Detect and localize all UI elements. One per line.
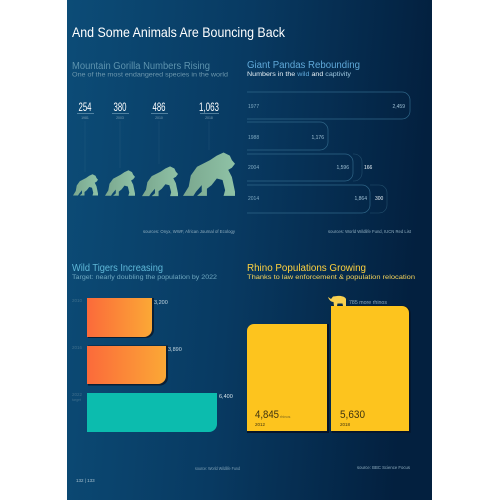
tiger year labels: 2010: [72, 298, 83, 303]
gorilla stat 380: 2003: [116, 116, 124, 120]
rhino source: source: BBC Science Focus: [357, 465, 410, 470]
gorilla stat 254: 1981: [81, 116, 89, 120]
gorilla heading: Mountain Gorilla Numbers Rising: [72, 61, 210, 72]
panda bar 2004: [247, 154, 373, 181]
panda bar 2014: [247, 185, 387, 213]
rhino heading: Rhino Populations Growing: [247, 263, 366, 274]
gorilla stat 380: 380: [114, 102, 126, 114]
rhino bar 2012: [247, 324, 329, 433]
gorilla stat 1,063: [199, 102, 219, 120]
tiger bar 2016: 3,890: [168, 347, 182, 353]
title: And Some Animals Are Bouncing Back: [72, 24, 286, 40]
panda subheading: Numbers in the wild and captivity: [247, 71, 352, 78]
page background: [67, 0, 432, 500]
gorilla stat 486: 486: [152, 102, 166, 114]
panda bar 1988: [247, 122, 328, 150]
panda heading: Giant Pandas Rebounding: [247, 60, 360, 71]
panda bar 1988: 1988: [248, 135, 259, 141]
panda bar 2014: 2014: [248, 196, 259, 202]
rhino subheading: Thanks to law enforcement & population relocation: [247, 274, 415, 281]
panel: mountain gorillas: [72, 61, 236, 234]
icon: gorilla 1: [73, 174, 98, 196]
tiger bar 2022 target: 6,400: [219, 394, 233, 400]
panda bar 2014: 1,864: [354, 196, 367, 202]
rhino bar 2012: 2012: [255, 422, 266, 427]
icon: gorilla 3: [142, 166, 178, 196]
rhino bar 2012: 4,845: [255, 409, 279, 421]
gorilla stat 486: [151, 102, 168, 120]
panel: rhinos: [247, 263, 415, 470]
tiger year labels: target: [72, 398, 81, 402]
panda bar 1988: 1,176: [311, 135, 324, 141]
gorilla stat 380: [112, 102, 129, 120]
panda source: sources: World Wildlife Fund, IUCN Red List: [328, 229, 412, 234]
tiger bar 2010: 3,200: [154, 300, 168, 306]
leader lines: [85, 121, 209, 172]
gorilla stat 1,063: 1,063: [199, 102, 219, 114]
rhino bar 2012: rhinos: [280, 415, 290, 419]
tiger heading: Wild Tigers Increasing: [72, 263, 163, 274]
panel: wild tigers: [72, 263, 241, 471]
icon: gorilla 2: [105, 170, 135, 196]
gorilla subheading: One of the most endangered species in the world: [72, 72, 228, 78]
panda bar 2014: 300: [375, 196, 384, 202]
panda bar 1977: 1977: [248, 104, 259, 110]
rhino callout: 785 more rhinos: [349, 300, 388, 306]
page number: 132 | 133: [76, 478, 95, 483]
panda bar 2004: 1,596: [336, 165, 349, 171]
gorilla stat 254: 254: [78, 102, 92, 114]
icon: gorilla 4: [183, 153, 235, 196]
icon: rhino: [328, 296, 346, 306]
panda bar 2004: 166: [364, 165, 373, 171]
tiger year labels: 2022: [72, 392, 83, 397]
rhino bar 2018: 5,630: [340, 409, 365, 421]
rhino bar 2018: [331, 306, 411, 433]
gorilla stat 1,063: 2018: [205, 116, 213, 120]
panda bar 1977: 2,459: [392, 104, 405, 110]
tiger subheading: Target: nearly doubling the population by 2022: [72, 274, 217, 281]
gorilla source: sources: Onyx, WWF, African Journal of Ecology: [143, 229, 236, 234]
gorilla stat 254: [77, 102, 94, 120]
panda bar 1977: [247, 92, 410, 119]
tiger bar 2010: [87, 298, 168, 338]
tiger bar 2016: [87, 346, 182, 386]
gorilla stat 486: 2010: [155, 116, 163, 120]
tiger year labels: [72, 298, 83, 402]
tiger source: source: World Wildlife Fund: [195, 466, 241, 471]
panel: giant pandas: [247, 60, 412, 234]
rhino bar 2018: 2018: [340, 422, 351, 427]
panda bar 2004: 2004: [248, 165, 259, 171]
tiger year labels: 2016: [72, 345, 83, 350]
tiger bar 2022 target: [87, 393, 233, 432]
